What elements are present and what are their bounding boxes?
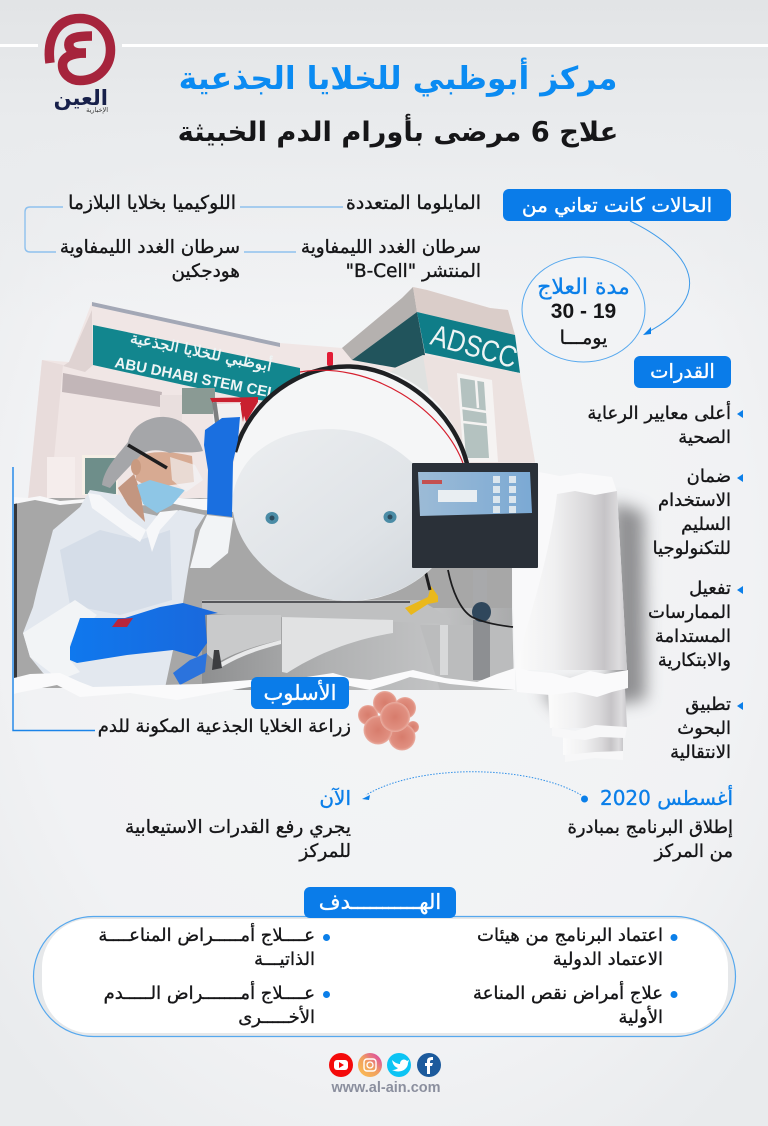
pill: conditions heading: الحالات كانت تعاني من [522, 193, 712, 217]
icon: cell cluster [358, 691, 419, 750]
goal: accreditation: اعتماد البرنامج من هيئات [477, 925, 663, 946]
photo: grey backdrop with torn paper edge [13, 496, 512, 688]
goal: accreditation [477, 925, 663, 970]
goal: autoimmune diseases: عــــلاج أمـــــراض المناعــــة [98, 925, 315, 946]
goal: other blood diseases: الأخـــــرى [238, 1007, 315, 1028]
timeline: August 2020 heading: أغسطس 2020 [600, 786, 733, 810]
capability 2 [653, 466, 731, 559]
duration label: مدة العلاج [537, 275, 630, 300]
capability 4: الانتقالية [670, 742, 731, 763]
condition: diffuse B-cell lymphoma [301, 237, 481, 282]
timeline: now text: يجري رفع القدرات الاستيعابية [125, 817, 351, 838]
goal: autoimmune diseases [98, 922, 315, 970]
capability 3: تفعيل [689, 578, 731, 599]
connector bracket: conditions [25, 207, 343, 252]
photo: control box [412, 463, 538, 568]
title: مركز أبوظبي للخلايا الجذعية [179, 61, 617, 97]
capability 3: والابتكارية [658, 650, 731, 671]
paper roll lower sections [515, 667, 628, 762]
capability 2: ضمان [687, 466, 731, 487]
condition: multiple myeloma: المايلوما المتعددة [346, 193, 481, 214]
condition: Hodgkin lymphoma: هودجكين [172, 261, 240, 282]
curved arrow: conditions to duration [630, 221, 690, 335]
goal: autoimmune diseases: الذاتيـــة [254, 949, 315, 970]
condition: diffuse B-cell lymphoma: سرطان الغدد الليمفاوية [301, 237, 481, 258]
capability 4: البحوث [677, 718, 731, 739]
capability 3 [648, 578, 731, 671]
goal: primary immunodeficiency: علاج أمراض نقص المناعة [473, 983, 663, 1004]
pill: method [251, 677, 349, 709]
goal: primary immunodeficiency: الأولية [618, 1007, 663, 1028]
condition: plasma cell leukemia: اللوكيميا بخلايا البلازما [68, 193, 236, 214]
photo: Abu Dhabi Stem Cells building: ABU DHABI STEM CELLS [113, 354, 296, 406]
capability 4: تطبيق [685, 694, 731, 715]
timeline dotted arrow [362, 772, 588, 802]
photo: liquid nitrogen tank [202, 570, 514, 690]
timeline: August 2020 text: من المركز [655, 841, 733, 862]
duration circle [522, 257, 645, 362]
timeline: now text [125, 817, 351, 862]
timeline: August 2020 text: إطلاق البرنامج بمبادرة [567, 817, 733, 838]
goal: accreditation: الاعتماد الدولية [553, 949, 663, 970]
capability bullets [737, 410, 743, 710]
pill: capabilities [634, 356, 731, 388]
timeline: August 2020 text [567, 817, 733, 862]
condition: diffuse B-cell lymphoma: المنتشر "B-Cell" [346, 261, 481, 282]
timeline: now text: للمركز [299, 841, 351, 862]
photo: Abu Dhabi Stem Cells building: أبوظبي للخلايا الجذعية [128, 327, 274, 376]
capability 3: المستدامة [655, 626, 731, 647]
paper roll [512, 472, 627, 670]
logo: Al-Ain [49, 18, 110, 80]
pill: conditions heading [503, 189, 731, 221]
website url: www.al-ain.com [331, 1080, 441, 1096]
condition: Hodgkin lymphoma [60, 237, 240, 282]
capability 2: للتكنولوجيا [653, 538, 731, 559]
capability 3: الممارسات [648, 602, 731, 623]
goal: other blood diseases: عــــلاج أمـــــــراض الـــــدم [104, 983, 315, 1004]
social icons [329, 1053, 441, 1077]
pill: method: الأسلوب [264, 681, 336, 705]
pill: capabilities: القدرات [650, 360, 715, 383]
photo: tank lid [210, 352, 468, 601]
capability 1 [587, 400, 731, 448]
photo: technician [23, 417, 240, 688]
header divider line [0, 44, 768, 47]
capability 4 [670, 694, 731, 763]
logo wordmark: العين [54, 86, 108, 110]
timeline: now heading: الآن [319, 786, 351, 810]
photo: Abu Dhabi Stem Cells building: ADSCC [427, 319, 521, 375]
photo: bottom torn paper edge [14, 668, 515, 700]
logo tagline: الإخبارية [86, 106, 108, 114]
photo: Abu Dhabi Stem Cells building [28, 287, 535, 500]
capability 2: السليم [681, 514, 731, 535]
method text: زراعة الخلايا الجذعية المكونة للدم [98, 716, 351, 737]
capability 2: الاستخدام [658, 490, 731, 511]
capability 1: أعلى معايير الرعاية [587, 403, 731, 424]
panel: goals [34, 916, 736, 1036]
duration unit: يومـــا [560, 327, 607, 349]
paper roll shadow [540, 502, 646, 712]
goal: other blood diseases [104, 980, 315, 1028]
left frame line for method section [13, 467, 95, 730]
duration value: 30 - 19 [551, 300, 616, 323]
goal: primary immunodeficiency [473, 980, 663, 1028]
condition: Hodgkin lymphoma: سرطان الغدد الليمفاوية [60, 237, 240, 258]
goal bullets [323, 934, 678, 998]
capability 1: الصحية [678, 427, 731, 448]
subtitle: علاج 6 مرضى بأورام الدم الخبيثة [178, 117, 618, 148]
pill: goal: الهـــــــــــدف [319, 890, 441, 914]
pill: goal [304, 887, 456, 918]
